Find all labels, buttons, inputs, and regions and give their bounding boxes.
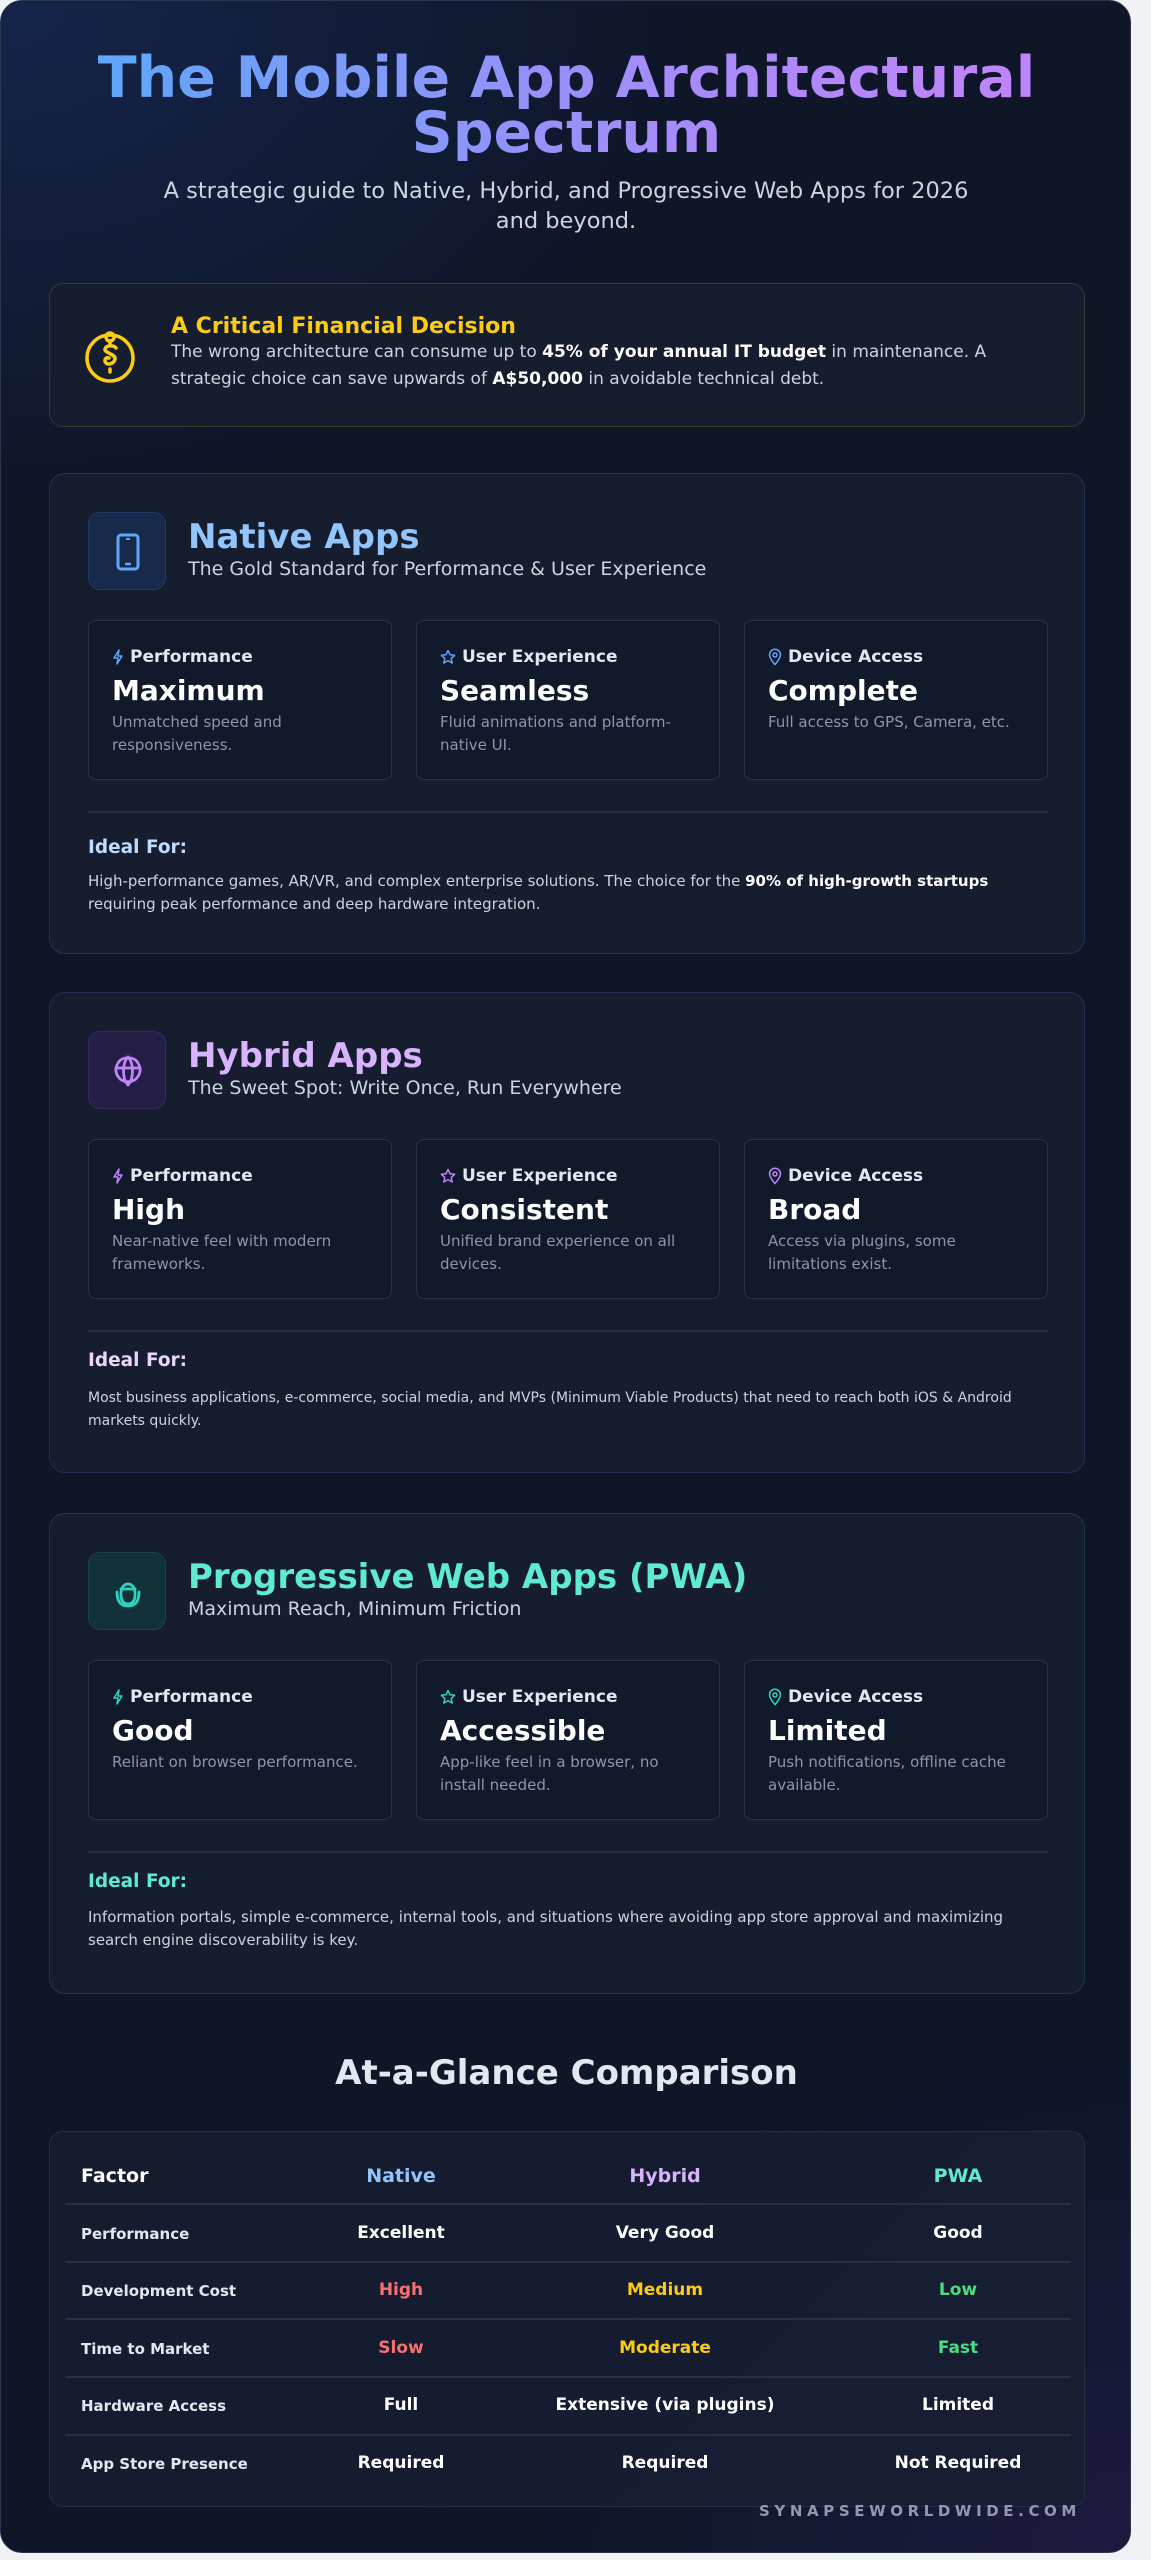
row: app store presence: App Store Presence [81, 2455, 248, 2473]
card: performance [88, 1139, 392, 1299]
card: device access: Full access to GPS, Camera, etc. [768, 713, 1010, 731]
panel: native apps [49, 473, 1085, 954]
table header: Factor [81, 2165, 148, 2187]
card: user experience: Seamless [440, 674, 589, 707]
row: hardware access: Extensive (via plugins) [556, 2395, 774, 2415]
card: performance: Maximum [112, 674, 265, 707]
card: device access: Device Access [788, 1166, 923, 1186]
row: performance: Very Good [616, 2223, 714, 2243]
heading: Hybrid Apps [188, 1036, 423, 1076]
icon: phone [88, 512, 166, 590]
card: user experience: User Experience [462, 1687, 617, 1707]
card: device access [744, 1660, 1048, 1820]
icon: pwa [88, 1552, 166, 1630]
card: performance [88, 1660, 392, 1820]
card: user experience [416, 1139, 720, 1299]
table header: Native [366, 2165, 436, 2187]
row: performance: Performance [81, 2225, 189, 2243]
ideal for text: High-performance games, AR/VR, and complex enterprise solutions. The choice for the 90% of high-growth startups requiring peak performance and deep hardware integration. [88, 872, 988, 913]
subheading: Maximum Reach, Minimum Friction [188, 1598, 521, 1620]
row: performance: Good [933, 2223, 983, 2243]
subheading: The Sweet Spot: Write Once, Run Everywhere [188, 1077, 622, 1099]
row: time to market: Time to Market [81, 2340, 209, 2358]
panel: progressive web apps [49, 1513, 1085, 1994]
card: user experience: App-like feel in a browser, no install needed. [440, 1753, 659, 1794]
row: time to market: Fast [938, 2338, 978, 2358]
card: user experience [416, 1660, 720, 1820]
row: development cost: High [379, 2280, 423, 2300]
row: hardware access: Full [384, 2395, 418, 2415]
ideal for text: Information portals, simple e-commerce, internal tools, and situations where avoiding app store approval and maximizing search engine discoverability is key. [88, 1908, 1003, 1949]
ideal for heading: Ideal For: [88, 837, 187, 858]
card: user experience [416, 620, 720, 780]
table header: PWA [934, 2165, 982, 2187]
row: development cost: Low [939, 2280, 977, 2300]
callout: financial decision [49, 283, 1085, 427]
row: performance: Excellent [357, 2223, 445, 2243]
row: performance [81, 2223, 983, 2243]
card: user experience: Accessible [440, 1714, 605, 1747]
card: device access: Device Access [788, 1687, 923, 1707]
row: app store presence: Not Required [895, 2453, 1021, 2473]
card: user experience: Consistent [440, 1193, 608, 1226]
callout heading: A Critical Financial Decision [171, 314, 516, 339]
row: hardware access [81, 2395, 994, 2415]
icon: dollar coin [85, 331, 135, 383]
comparison heading: At-a-Glance Comparison [335, 2053, 798, 2093]
card: device access: Device Access [788, 647, 923, 667]
table header [81, 2165, 982, 2187]
ideal for heading: Ideal For: [88, 1350, 187, 1371]
row: development cost [81, 2280, 977, 2300]
ideal for text: Most business applications, e-commerce, social media, and MVPs (Minimum Viable Products) that need to reach both iOS & Android markets quickly. [88, 1390, 1012, 1429]
title: The Mobile App Architectural [98, 45, 1035, 111]
card: user experience: User Experience [462, 1166, 617, 1186]
row: development cost: Development Cost [81, 2282, 236, 2300]
card: device access: Access via plugins, some limitations exist. [768, 1232, 956, 1273]
table header: Hybrid [629, 2165, 701, 2187]
card: user experience: Unified brand experience on all devices. [440, 1232, 675, 1273]
card: device access [744, 620, 1048, 780]
card: performance: Reliant on browser performance. [112, 1753, 358, 1771]
row: hardware access: Limited [922, 2395, 994, 2415]
row: time to market: Moderate [619, 2338, 711, 2358]
card: performance [88, 620, 392, 780]
heading: Progressive Web Apps (PWA) [188, 1557, 747, 1597]
row: time to market: Slow [378, 2338, 424, 2358]
card: device access: Broad [768, 1193, 861, 1226]
card: user experience: Fluid animations and platform-native UI. [440, 713, 671, 754]
card: performance: High [112, 1193, 185, 1226]
card: device access: Limited [768, 1714, 887, 1747]
row: app store presence: Required [358, 2453, 444, 2473]
row: hardware access: Hardware Access [81, 2397, 226, 2415]
row: app store presence [81, 2453, 1021, 2473]
card: performance: Performance [130, 1166, 253, 1186]
row: development cost: Medium [627, 2280, 703, 2300]
card: performance: Performance [130, 1687, 253, 1707]
card: performance: Good [112, 1714, 194, 1747]
card: user experience: User Experience [462, 647, 617, 667]
card: performance: Near-native feel with modern frameworks. [112, 1232, 331, 1273]
card: performance: Unmatched speed and responsiveness. [112, 713, 282, 754]
card: device access: Complete [768, 674, 918, 707]
subtitle: A strategic guide to Native, Hybrid, and Progressive Web Apps for 2026 and beyond. [164, 178, 968, 234]
callout text: The wrong architecture can consume up to 45% of your annual IT budget in maintenance. A strategic choice can save upwards of A$50,000 in avoidable technical debt. [171, 342, 986, 389]
comparison table [49, 2131, 1085, 2507]
card: performance: Performance [130, 647, 253, 667]
icon: globe [88, 1031, 166, 1109]
subheading: The Gold Standard for Performance & User Experience [188, 558, 706, 580]
row: time to market [81, 2338, 978, 2358]
heading: Native Apps [188, 517, 420, 557]
row: app store presence: Required [622, 2453, 708, 2473]
footer brand: SYNAPSEWORLDWIDE.COM [759, 2502, 1081, 2520]
ideal for heading: Ideal For: [88, 1871, 187, 1892]
card: device access: Push notifications, offline cache available. [768, 1753, 1006, 1794]
title [1, 51, 1132, 161]
title: Spectrum [412, 100, 721, 166]
panel: hybrid apps [49, 992, 1085, 1473]
card: device access [744, 1139, 1048, 1299]
